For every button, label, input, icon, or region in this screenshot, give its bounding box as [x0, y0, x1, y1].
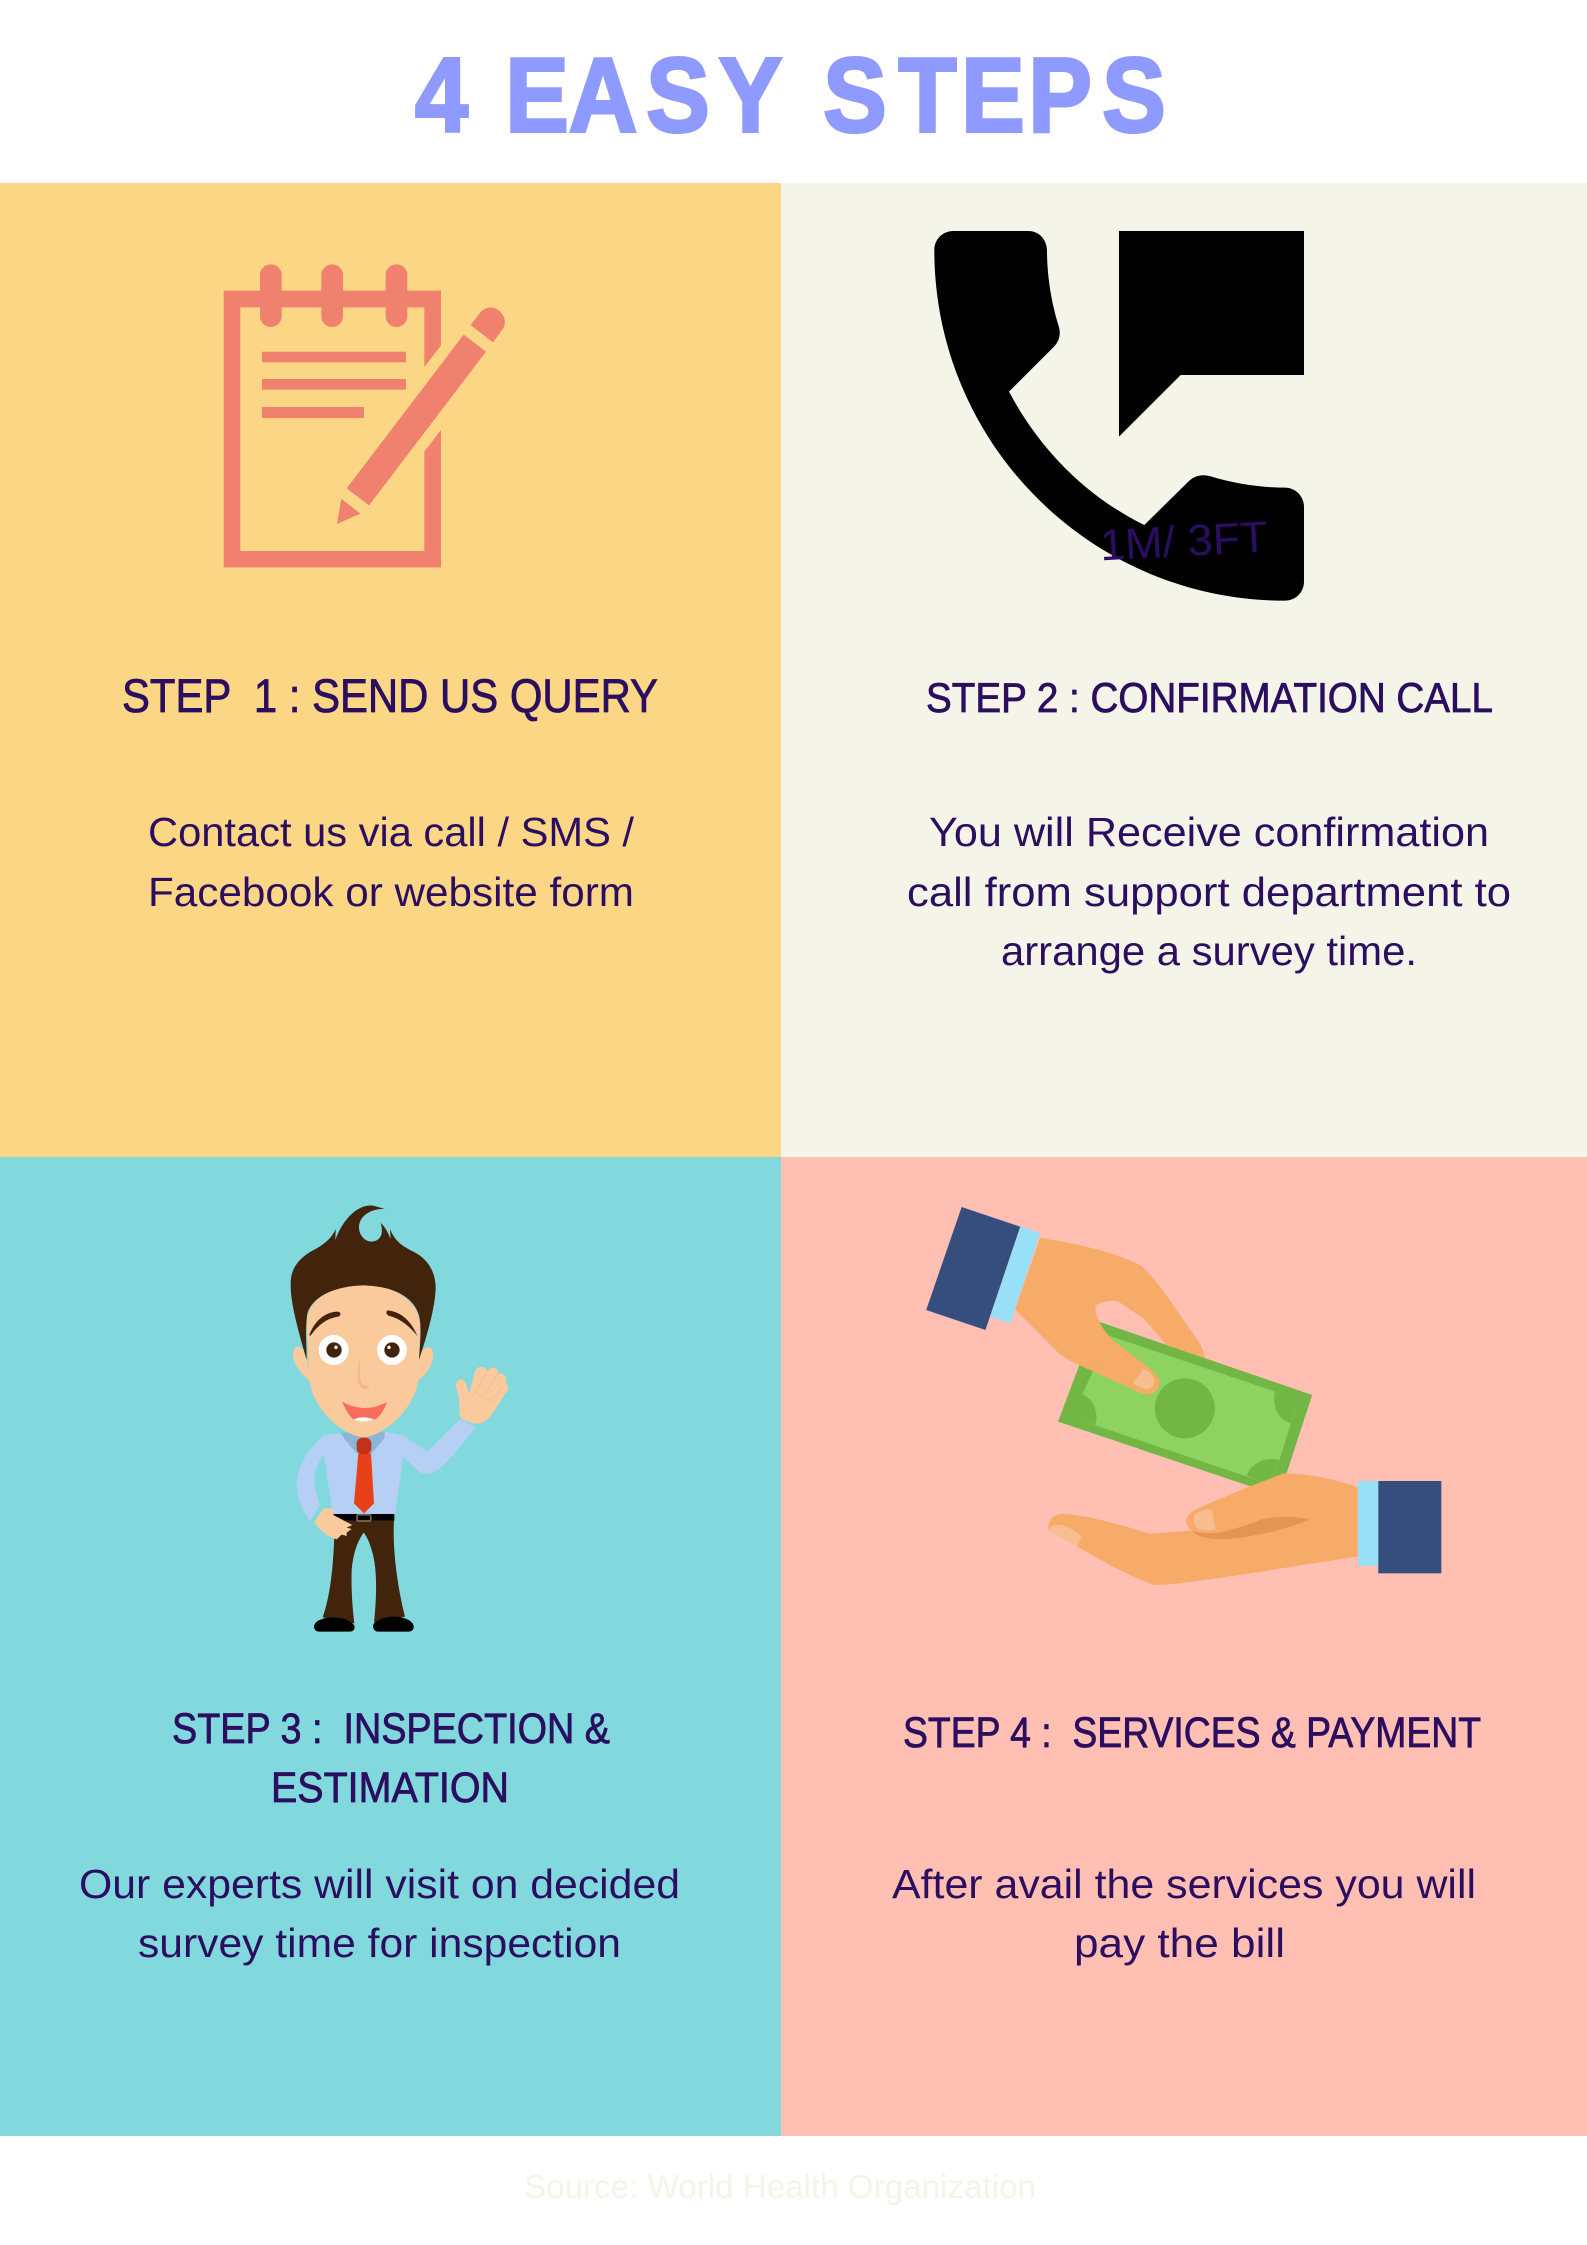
step 2 description: arrange a survey time.	[1001, 928, 1417, 974]
icon: businessman waving	[291, 1205, 508, 1632]
step 2 heading: STEP 2 : CONFIRMATION CALL	[926, 674, 1493, 721]
icon: hands exchanging money	[926, 1207, 1441, 1585]
step 1 description: Contact us via call / SMS /	[148, 809, 635, 855]
step 3 heading: STEP 3 : INSPECTION &	[172, 1705, 610, 1753]
panel: step 2 confirmation call	[781, 183, 1587, 1157]
step 3 description: survey time for inspection	[138, 1920, 621, 1966]
distance label: 1M/ 3FT	[1099, 513, 1269, 570]
step 1 description	[148, 809, 635, 915]
step 3 description	[79, 1861, 680, 1966]
step 3 heading: ESTIMATION	[271, 1764, 509, 1812]
step 3 heading	[172, 1705, 610, 1812]
step 2 description: You will Receive confirmation	[929, 809, 1489, 855]
step 2 description: call from support department to	[907, 869, 1511, 915]
step 3 description: Our experts will visit on decided	[79, 1861, 680, 1907]
panel: step 3 inspection and estimation	[0, 1157, 781, 2136]
title: 4 EASY STEPS	[415, 37, 1166, 155]
step 1 description: Facebook or website form	[148, 869, 634, 915]
step 4 description: After avail the services you will	[892, 1861, 1476, 1907]
step 2 description	[907, 809, 1511, 974]
panel: step 1 send us query	[0, 183, 781, 1157]
icon: phone with speech bubble	[934, 231, 1304, 601]
step 4 description: pay the bill	[1074, 1920, 1285, 1966]
step 1 heading: STEP 1 : SEND US QUERY	[122, 669, 658, 722]
icon: notepad and pencil	[224, 264, 505, 567]
panel: step 4 services and payment	[781, 1157, 1587, 2136]
source note: Source: World Health Organization	[524, 2168, 1036, 2205]
step 4 heading: STEP 4 : SERVICES & PAYMENT	[903, 1709, 1481, 1757]
step 4 description	[892, 1861, 1476, 1966]
